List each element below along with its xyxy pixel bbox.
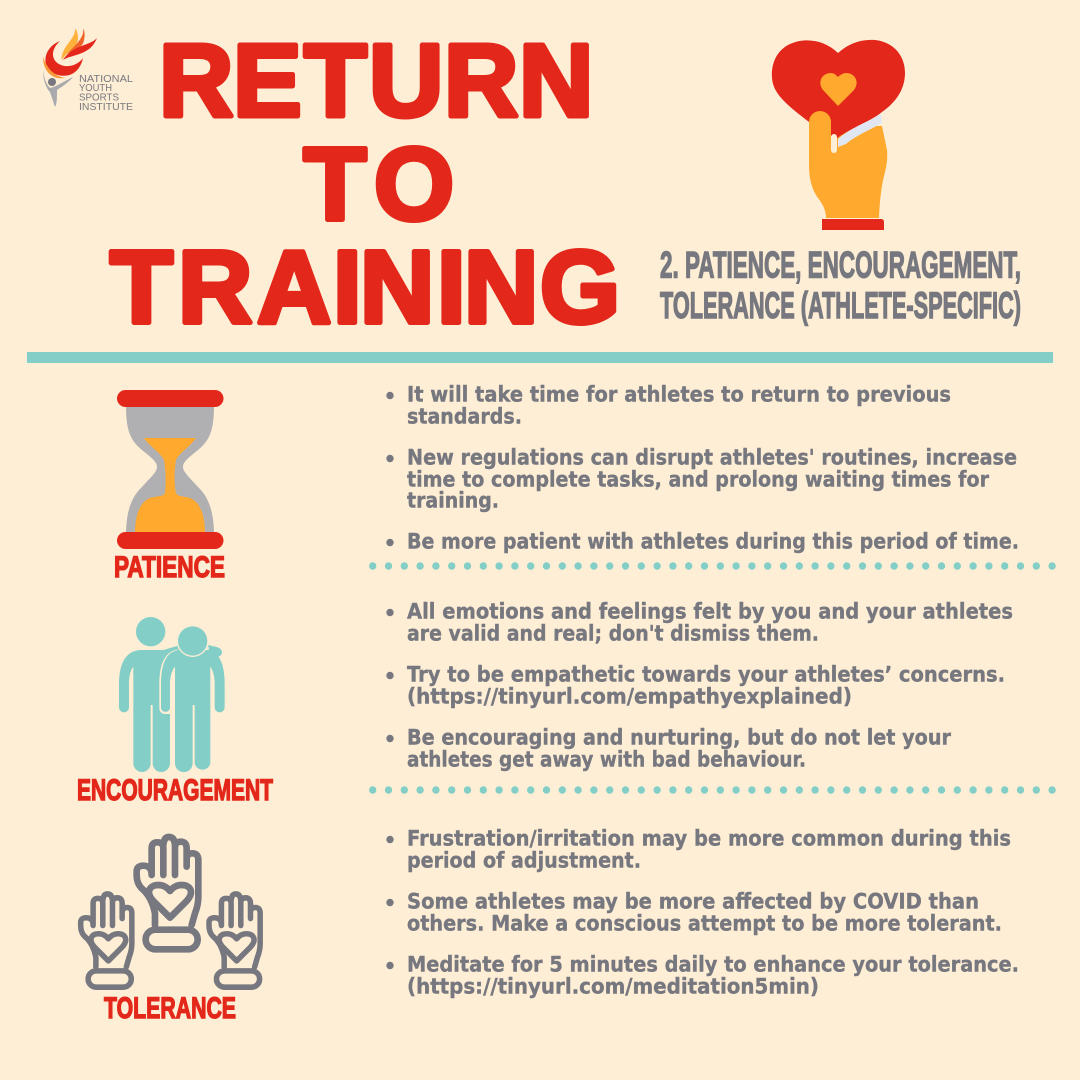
text: encouragement bullets: athletes get away with bad behaviour. xyxy=(407,748,806,772)
icon: hourglass xyxy=(117,390,224,549)
dotted divider xyxy=(373,562,1053,570)
logo: National Youth Sports Institute: SPORTS xyxy=(79,92,119,104)
text: patience bullets xyxy=(386,382,1019,554)
text: patience bullets: Be more patient with athletes during this period of time. xyxy=(407,530,1019,554)
text: tolerance bullets: (https://tinyurl.com/meditation5min) xyxy=(407,974,819,998)
text: encouragement bullets: (https://tinyurl.com/empathyexplained) xyxy=(407,684,852,708)
text: patience bullets: It will take time for athletes to return to previous xyxy=(407,382,951,406)
text: tolerance bullets: Some athletes may be more affected by COVID than xyxy=(407,890,979,914)
icon: raised hands with hearts xyxy=(81,837,260,987)
text: encouragement bullets: are valid and real; don't dismiss them. xyxy=(407,622,819,646)
panel: encouragement xyxy=(77,600,1013,807)
title: TRAINING xyxy=(110,230,620,344)
text: tolerance bullets: Frustration/irritation may be more common during this xyxy=(407,826,1011,850)
label: tolerance: TOLERANCE xyxy=(104,992,236,1025)
title: RETURN xyxy=(159,23,593,138)
logo: National Youth Sports Institute: INSTITUTE xyxy=(79,101,133,113)
text: encouragement bullets xyxy=(386,600,1013,772)
title: TO xyxy=(304,126,454,242)
logo: National Youth Sports Institute: NATIONAL xyxy=(79,73,133,85)
text: patience bullets: New regulations can disrupt athletes' routines, increase xyxy=(407,446,1017,470)
text: patience bullets: time to complete tasks, and prolong waiting times for xyxy=(407,468,990,492)
logo: National Youth Sports Institute: YOUTH xyxy=(79,82,112,94)
text: tolerance bullets: others. Make a conscious attempt to be more tolerant. xyxy=(407,912,1002,936)
text: patience bullets: training. xyxy=(407,488,499,512)
text: encouragement bullets: Try to be empathetic towards your athletes’ concerns. xyxy=(407,662,1005,686)
text: tolerance bullets: period of adjustment. xyxy=(407,848,641,872)
text: tolerance bullets xyxy=(386,826,1019,998)
text: tolerance bullets: Meditate for 5 minutes daily to enhance your tolerance. xyxy=(407,952,1019,976)
panel: tolerance xyxy=(81,826,1019,1025)
title xyxy=(110,23,620,344)
label: patience: PATIENCE xyxy=(114,551,225,584)
text: patience bullets: standards. xyxy=(407,404,522,428)
text: encouragement bullets: All emotions and feelings felt by you and your athletes xyxy=(407,600,1013,624)
logo: National Youth Sports Institute xyxy=(43,28,133,113)
text: encouragement bullets: Be encouraging and nurturing, but do not let your xyxy=(407,726,952,750)
label: encouragement: ENCOURAGEMENT xyxy=(77,774,273,807)
panel: patience xyxy=(114,382,1019,584)
icon: hand holding heart xyxy=(772,40,905,230)
divider bar xyxy=(27,352,1053,363)
icon: two people xyxy=(119,617,225,772)
dotted divider xyxy=(373,786,1053,794)
subtitle xyxy=(660,244,1021,326)
